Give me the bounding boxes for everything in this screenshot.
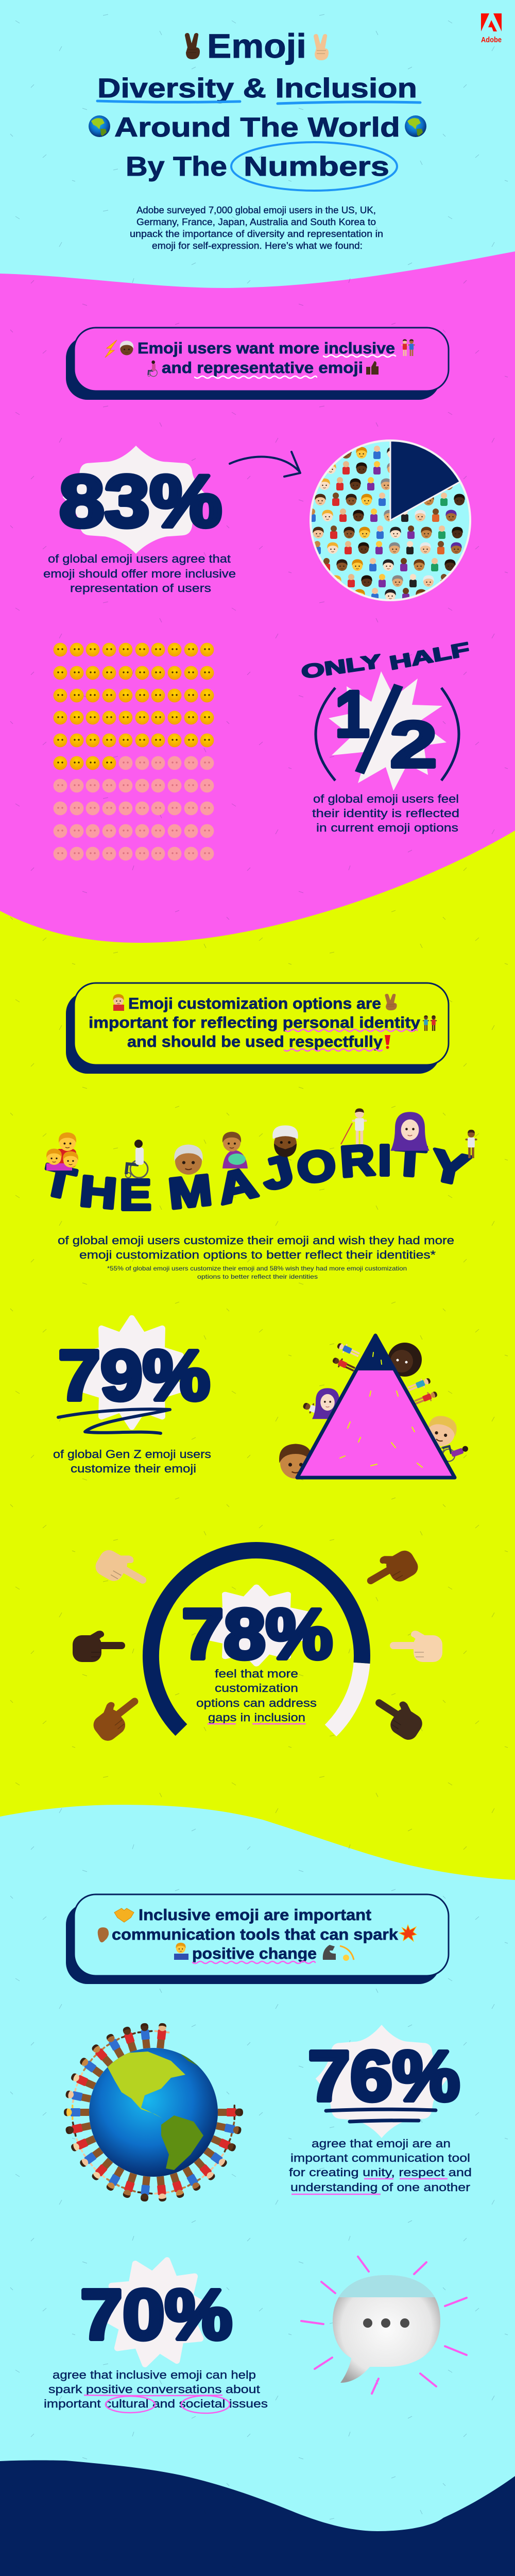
panel: pink section background [0,251,515,979]
majority caption: of global emoji users customize their emoji and wish they had more [58,1234,454,1247]
icon: standing person [466,1130,477,1158]
starburst background [63,446,209,554]
icon: globe left [89,115,110,137]
icon: person with cane [341,1108,367,1144]
triangle [297,1335,455,1478]
panel: cyan section background [0,1805,515,2524]
face grid: 54 of 100 [54,643,214,860]
rays [301,2257,467,2394]
underline: Inclusion [278,102,420,104]
caption: emoji should offer more inclusive [43,567,236,580]
fraction: 1 [335,677,370,751]
heading: THE MAJORITY: J [256,1145,299,1200]
heading: THE MAJORITY: A [213,1158,262,1214]
caption: understanding of one another [290,2181,470,2194]
icon: hand bottom left [87,1687,148,1744]
number: 70% [80,2275,232,2354]
squiggle: representative [195,376,317,378]
icon: hand bottom right [367,1688,428,1743]
icon: thumbs up [366,361,379,375]
icon: globe right [405,115,426,137]
icon: hand middle right [390,1631,442,1662]
dots [363,2318,409,2328]
footnote: *55% of global emoji users customize their emoji and 58% wish they had more emoji customization [107,1265,407,1272]
icon: ear [98,1927,109,1942]
underlines [208,1723,306,1724]
icon: muscle [323,1945,336,1960]
stat: 70 percent [44,2250,268,2413]
circle: Numbers [231,142,397,191]
number: 83% [59,461,222,543]
icon: blond head [424,1413,459,1449]
triangle with people [279,1335,470,1479]
stat: 78 percent [73,1543,442,1744]
title line: By The: By The [126,151,227,182]
heading line 3: positive change [192,1944,317,1962]
wedge: 17 percent [390,440,460,520]
icon: older man [120,341,133,355]
heading: THE MAJORITY: R [339,1136,376,1186]
heading line 1: Inclusive emoji are important [139,1906,371,1924]
icon: older woman [174,1145,203,1175]
icon: exclamation [385,1035,390,1049]
underline [84,2395,222,2396]
icon: family [46,1132,78,1171]
intro text: emoji for self-expression. Here’s what we found: [152,241,363,251]
icon: explosion [399,1925,417,1941]
scribble [58,1409,170,1433]
heading: THE MAJORITY: T [392,1136,427,1186]
icon: woman with hijab [390,1112,430,1151]
intro text: Adobe surveyed 7,000 global emoji users in the US, UK, [136,205,376,215]
ring of people [64,2022,243,2202]
panel: lime section background [0,831,515,1906]
caption: customize their emoji [71,1462,196,1475]
icon: man with turban [272,1125,298,1157]
caption: important cultural and societal issues [44,2397,268,2410]
stat: 79 percent [53,1318,211,1475]
icon: wheelchair user [126,1140,148,1178]
stat: only half [300,638,471,834]
footnote [107,1265,407,1280]
intro text: unpack the importance of diversity and representation in [130,229,383,239]
icon: light peace hand [314,34,329,60]
heading line 2: important for reflecting personal identity [89,1013,421,1031]
bubble [333,2275,440,2383]
icon: comet [340,1946,354,1961]
caption: options can address [196,1697,317,1709]
heading: ONLY HALF: HALF [388,638,471,674]
number: 79% [58,1336,210,1415]
caption: feel that more [215,1667,298,1680]
icon: curly hair head [388,1343,422,1377]
intro text [130,205,383,251]
majority caption: emoji customization options to better reflect their identities* [79,1248,436,1261]
starburst [206,1587,307,1664]
continents [107,2048,203,2170]
heading: THE MAJORITY: I [378,1136,391,1184]
caption [312,792,459,834]
heading: THE MAJORITY: E [119,1171,151,1219]
squiggle: inclusive [323,355,396,357]
caption: agree that inclusive emoji can help [53,2368,256,2381]
caption: in current emoji options [316,821,458,834]
caption: their identity is reflected [312,807,459,820]
icon: man with blocks [174,1943,188,1960]
title line: Diversity and Inclusion: Diversity & Inclusion [97,73,417,104]
fraction [335,677,437,782]
icon: long hair head [279,1444,312,1479]
title line: Around The World: Around The World [114,112,400,143]
caption: important communication tool [290,2151,470,2164]
number: 76% [308,2037,460,2116]
caption: gaps in inclusion [208,1711,305,1724]
icon: mother and child [113,994,124,1011]
gauge navy arc [151,1550,362,1730]
caption: representation of users [70,582,211,595]
caption [44,2368,268,2410]
icon: mother and baby [222,1132,248,1168]
squiggle: positive change [193,1961,315,1963]
intro text: Germany, France, Japan, Australia and South Korea to [136,217,376,227]
parentheses [316,688,459,781]
icon: two women [423,1015,437,1031]
heading line 1: Emoji customization options are [128,994,381,1012]
heading: THE MAJORITY: T [39,1156,79,1209]
number: 78% [182,1595,333,1674]
caption: of global emoji users agree that [48,552,231,565]
heading line 3: and should be used respectfully [127,1032,383,1050]
stat: 76 percent [289,2025,472,2194]
underline: Diversity [97,101,240,102]
title [89,27,426,191]
caption: for creating unity, respect and [289,2166,472,2179]
callout: communication tools [66,1894,449,1984]
caption: of global Gen Z emoji users [53,1448,211,1461]
caption [196,1667,317,1724]
squiggle: respectfully [284,1049,382,1051]
squiggle: personal identity [285,1029,417,1031]
caption: spark positive conversations about [48,2383,260,2396]
icon: hijab head [312,1388,343,1419]
stat: 83 percent [43,446,236,595]
caption [43,552,236,595]
icon: wheelchair user [148,361,157,377]
heading: THE MAJORITY: O [294,1140,339,1194]
globe with ring of people [64,2022,243,2202]
icon: peace hand [385,994,397,1010]
heading: ONLY HALF [300,638,471,683]
heading text line 1: Emoji users want more inclusive [138,339,395,357]
icon: handshake [114,1908,134,1922]
callout: customization [66,983,449,1074]
circle: cultural [106,2396,155,2413]
heading text line 2: and representative emoji [162,359,363,377]
icon: hand middle left [73,1631,125,1662]
figures behind triangle [301,1341,470,1463]
heading line 2: communication tools that can spark [112,1925,399,1943]
title line: Emoji: Emoji [207,27,306,65]
globe [89,2048,218,2177]
majority caption [58,1234,454,1261]
icon: couple [401,339,415,356]
footnote: options to better reflect their identities [197,1273,318,1280]
panel: navy section background [0,2460,515,2576]
double underline [326,2109,436,2122]
speech bubble with rays [301,2257,467,2394]
pie chart of emoji [305,440,470,601]
caption [53,1448,211,1475]
heading: THE MAJORITY: M [166,1165,214,1218]
caption: customization [215,1682,298,1694]
caption: agree that emoji are an [312,2137,451,2150]
underlines [291,2179,448,2194]
heading: THE MAJORITY: Y [426,1140,474,1195]
title line: Numbers: Numbers [244,151,389,182]
caption [289,2137,472,2194]
starburst [329,671,447,791]
callout: more inclusive emoji [66,328,449,400]
heading: ONLY HALF: ONLY [300,651,383,683]
icon: dark peace hand [185,33,200,59]
caption: of global emoji users feel [313,792,459,805]
starburst [83,1318,181,1427]
starburst [97,2250,215,2375]
circle: societal [181,2396,230,2413]
logo: Adobe: Adobe [481,36,502,44]
triangle tip [356,1335,394,1370]
icon: hand top right [360,1544,421,1597]
heading: THE MAJORITY: H [78,1167,118,1218]
heading: THE MAJORITY [39,1108,477,1219]
icon: lightning [105,340,117,358]
blob [316,2025,448,2138]
fraction: 2 [390,708,437,782]
arrow to pie [230,452,300,477]
icon: hand top left [92,1543,153,1596]
bubble top tint [339,2275,435,2297]
logo: Adobe [481,13,502,44]
gauge white arc [331,1663,362,1731]
